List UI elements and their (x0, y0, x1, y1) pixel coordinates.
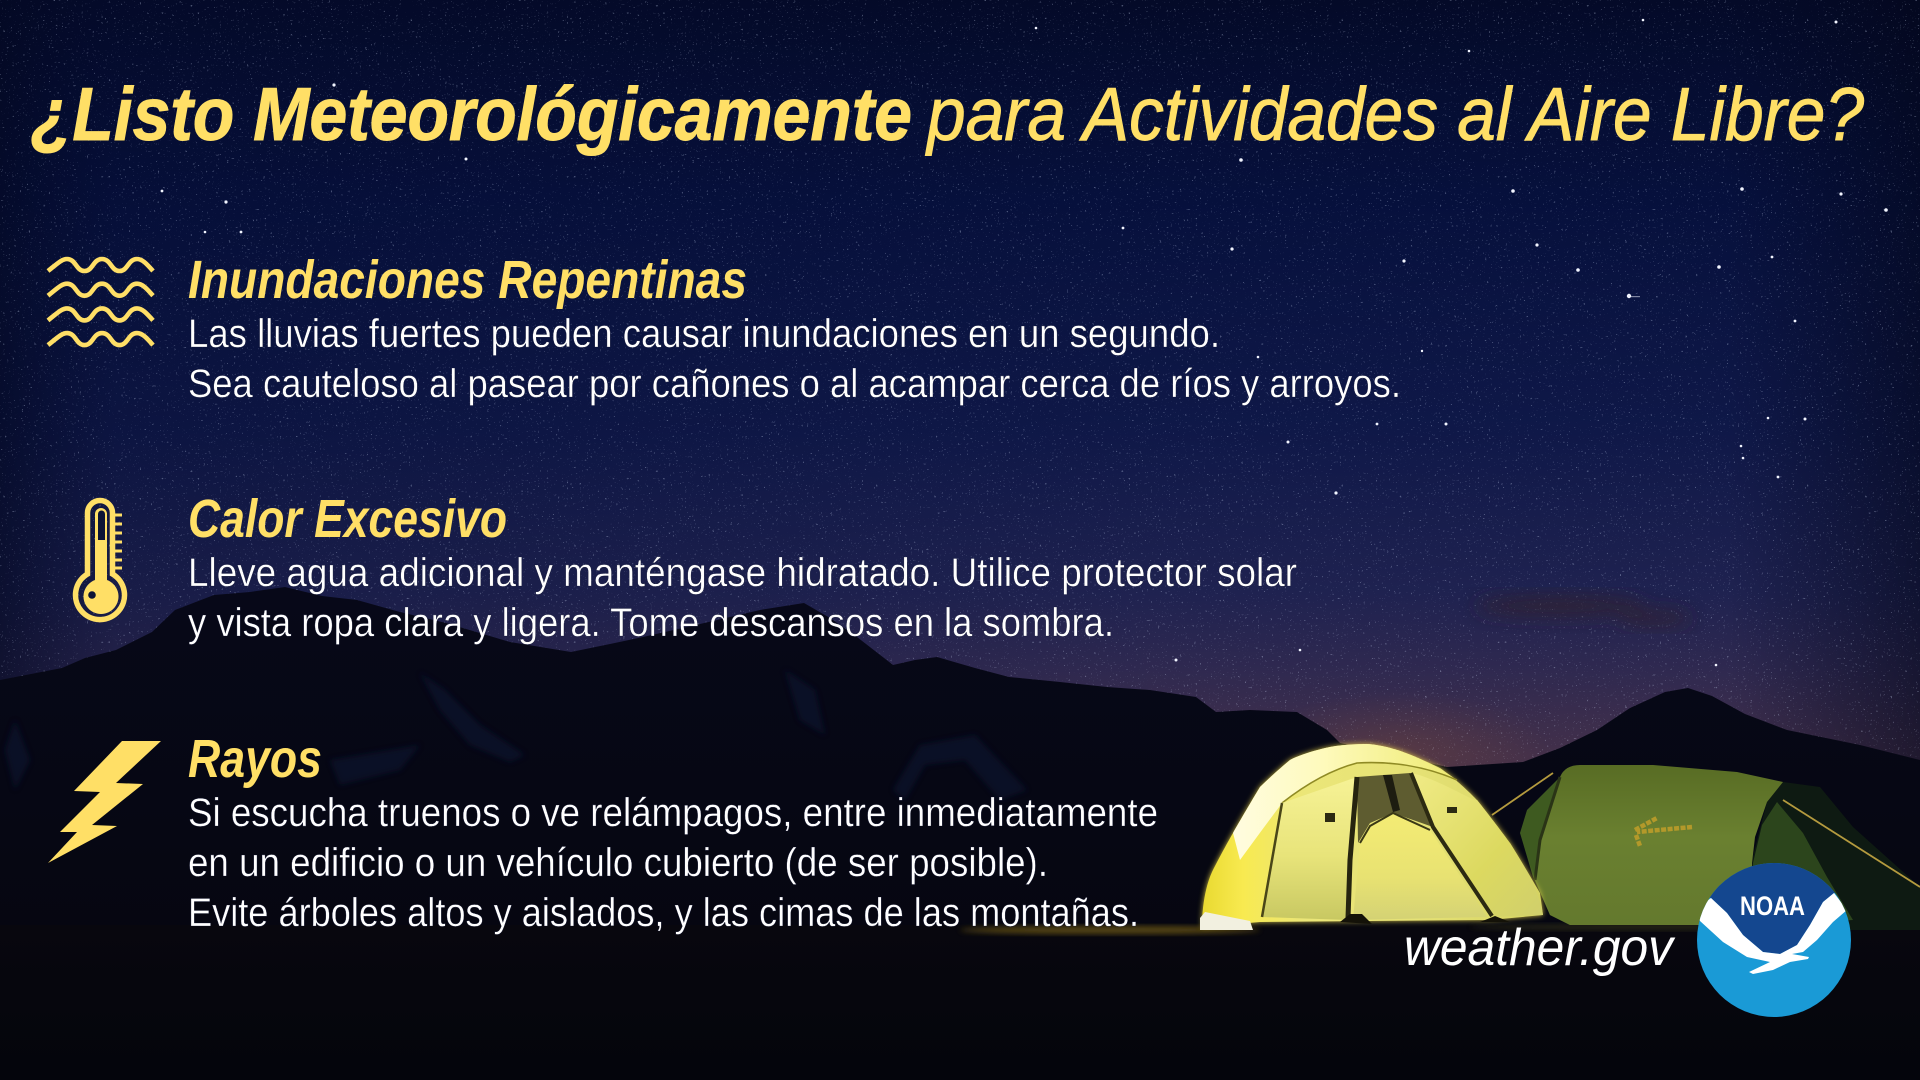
body: flash floods (188, 312, 1401, 406)
glowing yellow tent (1200, 744, 1543, 930)
icon: waves (48, 259, 153, 345)
heading: excessive heat: Calor Excesivo (188, 489, 507, 549)
body: lightning: Evite árboles altos y aislados, y las cimas de las montañas. (188, 891, 1139, 935)
tent guy lines (1492, 773, 1920, 887)
dark cloud (1475, 596, 1691, 625)
ground (0, 924, 1920, 1080)
dark door flap (1357, 773, 1433, 843)
bright stars (161, 19, 1888, 666)
section: flash floods (48, 250, 1401, 406)
body: flash floods: Las lluvias fuertes pueden causar inundaciones en un segundo. (188, 312, 1220, 356)
icon: thermometer (76, 500, 125, 620)
body: excessive heat: y vista ropa clara y ligera. Tome descansos en la sombra. (188, 601, 1114, 645)
left panel (1262, 777, 1357, 920)
website label: weather.gov (1404, 919, 1676, 977)
right panel (1412, 773, 1543, 917)
door interior (1353, 813, 1487, 920)
tent arrow logo (1635, 818, 1692, 846)
green tent (1520, 765, 1920, 930)
icon: lightning bolt (48, 741, 161, 863)
body: lightning (188, 791, 1158, 935)
section: lightning (48, 729, 1158, 935)
body: lightning: Si escucha truenos o ve relámpagos, entre inmediatamente (188, 791, 1158, 835)
heading title: ¿Listo Meteorológicamente (31, 72, 912, 156)
top band (1233, 744, 1457, 860)
body: excessive heat: Lleve agua adicional y manténgase hidratado. Utilice protector solar (188, 551, 1297, 595)
heading title: para Actividades al Aire Libre? (925, 72, 1864, 156)
mountain ridge (0, 587, 1920, 1000)
section: excessive heat (76, 489, 1297, 645)
body: lightning: en un edificio o un vehículo cubierto (de ser posible). (188, 841, 1048, 885)
heading: flash floods: Inundaciones Repentinas (188, 250, 747, 310)
heading: lightning: Rayos (188, 729, 322, 789)
body: flash floods: Sea cauteloso al pasear por cañones o al acampar cerca de ríos y arroyos. (188, 362, 1401, 406)
NOAA logo: NOAA (1740, 891, 1805, 921)
body: excessive heat (188, 551, 1297, 645)
heading title (31, 72, 1864, 156)
NOAA logo (1697, 863, 1851, 1017)
